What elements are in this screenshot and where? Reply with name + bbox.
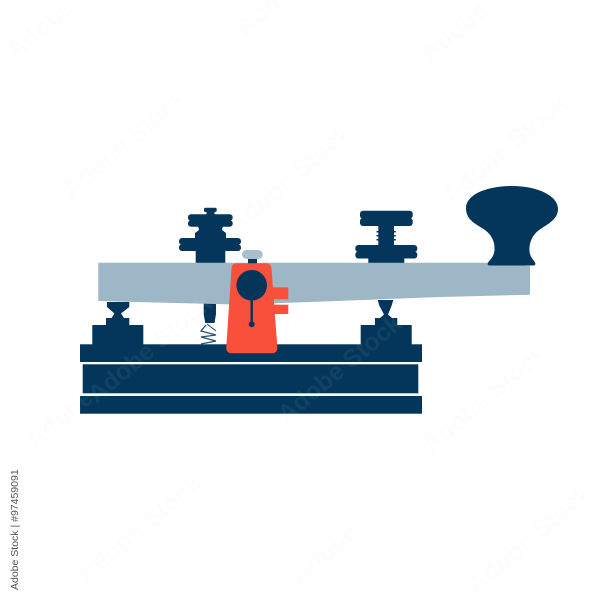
stock watermarks: Adobe — [21, 383, 99, 455]
upper tab — [272, 287, 288, 299]
stock watermarks: Adobe Stock — [222, 119, 357, 239]
right pivot — [361, 300, 412, 344]
lower tab — [274, 305, 288, 314]
stock watermarks: Adobe Stock — [462, 479, 597, 599]
stock watermarks: Adobe Stock — [57, 84, 192, 204]
top button — [242, 250, 263, 264]
base: three stacked plates — [80, 344, 422, 414]
side credit: Adobe Stock | #97459091 — [9, 469, 21, 590]
stock watermarks: Adobe Stock — [272, 309, 407, 429]
stock watermarks: Adobe Stock — [72, 469, 207, 589]
right adjusting screw — [355, 211, 417, 263]
contact pin — [204, 300, 216, 323]
lever arm — [98, 263, 530, 304]
stock watermarks: Adobe Stock — [82, 289, 217, 409]
frame body — [226, 263, 277, 353]
stock watermarks: Adobe Stock — [437, 89, 572, 209]
red frame — [226, 250, 288, 353]
spring — [201, 324, 216, 344]
knob — [466, 186, 558, 266]
stock watermarks: Adobe Stock — [417, 339, 552, 459]
left pivot — [92, 302, 143, 344]
left adjusting screw — [179, 208, 241, 264]
dial and pendulum — [236, 270, 267, 327]
stock watermarks: Adobe — [286, 518, 364, 590]
